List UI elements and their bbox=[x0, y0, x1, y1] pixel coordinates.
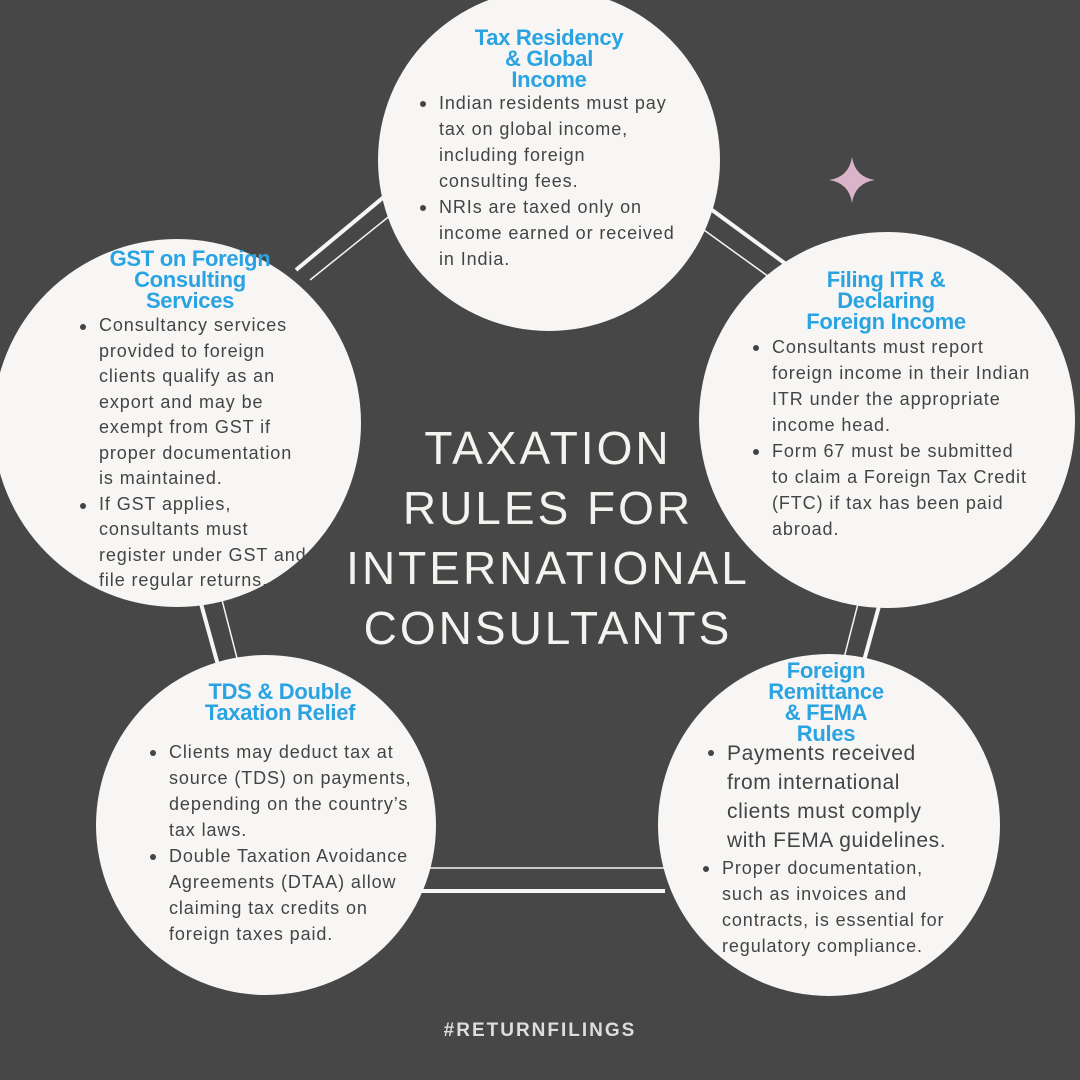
panel: remittance bbox=[703, 658, 946, 956]
text: remittance large: clients must comply bbox=[727, 800, 922, 823]
text: GST: consultants must bbox=[99, 519, 248, 539]
text: tax residency bbox=[420, 93, 675, 269]
text: TDS: depending on the country’s bbox=[169, 794, 408, 814]
text: tax residency: NRIs are taxed only on bbox=[439, 197, 642, 217]
panel: filing ITR bbox=[753, 267, 1030, 539]
text: remittance small: contracts, is essential for bbox=[722, 910, 944, 930]
heading: remittance: & FEMA bbox=[785, 700, 867, 725]
heading: GST bbox=[110, 246, 270, 313]
heading: tax residency: Income bbox=[511, 67, 587, 92]
title: CONSULTANTS bbox=[364, 602, 732, 654]
text: remittance small bbox=[703, 858, 944, 956]
title bbox=[346, 422, 750, 654]
text: remittance small: Proper documentation, bbox=[722, 858, 923, 878]
text: remittance large: from international bbox=[727, 771, 900, 794]
text: filing ITR: to claim a Foreign Tax Credit bbox=[772, 467, 1027, 487]
text: tax residency: in India. bbox=[439, 249, 510, 269]
text: TDS: Double Taxation Avoidance bbox=[169, 846, 408, 866]
text: GST: register under GST and bbox=[99, 544, 307, 564]
heading: filing ITR: Declaring bbox=[837, 288, 935, 313]
text: remittance large bbox=[708, 742, 946, 852]
text: TDS: source (TDS) on payments, bbox=[169, 768, 412, 788]
text: TDS: foreign taxes paid. bbox=[169, 924, 333, 944]
text: filing ITR: Consultants must report bbox=[772, 337, 984, 357]
text: GST: clients qualify as an bbox=[99, 366, 275, 386]
text: remittance small: regulatory compliance. bbox=[722, 936, 923, 956]
heading: TDS: TDS & Double bbox=[208, 679, 352, 704]
heading: remittance: Remittance bbox=[768, 679, 884, 704]
heading: GST: Consulting bbox=[134, 267, 246, 292]
text: TDS: tax laws. bbox=[169, 820, 247, 840]
text: filing ITR bbox=[753, 337, 1030, 539]
text: filing ITR: income head. bbox=[772, 415, 891, 435]
text: GST: provided to foreign bbox=[99, 340, 265, 360]
text: GST: is maintained. bbox=[99, 468, 223, 488]
text: tax residency: income earned or received bbox=[439, 223, 675, 243]
text: GST: If GST applies, bbox=[99, 494, 231, 514]
text: tax residency: including foreign bbox=[439, 145, 585, 165]
text: filing ITR: abroad. bbox=[772, 519, 839, 539]
text: tax residency: Indian residents must pay bbox=[439, 93, 667, 113]
heading: tax residency: Tax Residency bbox=[475, 25, 623, 50]
text: tax residency: tax on global income, bbox=[439, 119, 628, 139]
text: remittance small: such as invoices and bbox=[722, 884, 907, 904]
title: TAXATION bbox=[424, 422, 672, 474]
heading: GST: Services bbox=[146, 288, 234, 313]
text: TDS: claiming tax credits on bbox=[169, 898, 368, 918]
heading: remittance: Foreign bbox=[787, 658, 865, 683]
text: remittance large: with FEMA guidelines. bbox=[727, 829, 946, 852]
panel: TDS bbox=[150, 679, 412, 944]
text: remittance large: Payments received bbox=[727, 742, 916, 765]
heading: filing ITR bbox=[806, 267, 966, 334]
text: filing ITR: (FTC) if tax has been paid bbox=[772, 493, 1004, 513]
text: filing ITR: foreign income in their Indian bbox=[772, 363, 1030, 383]
heading: filing ITR: Foreign Income bbox=[806, 309, 966, 334]
text: GST: export and may be bbox=[99, 392, 263, 412]
panel: tax residency bbox=[420, 25, 675, 269]
text: GST bbox=[80, 315, 307, 590]
icon: sparkle bbox=[829, 157, 875, 203]
text: GST: file regular returns. bbox=[99, 570, 268, 590]
heading: tax residency bbox=[475, 25, 624, 92]
text: tax residency: consulting fees. bbox=[439, 171, 578, 191]
title: INTERNATIONAL bbox=[346, 542, 750, 594]
heading: TDS: Taxation Relief bbox=[205, 700, 355, 725]
text: GST: proper documentation bbox=[99, 442, 292, 462]
text: TDS bbox=[150, 742, 412, 944]
text: TDS: Agreements (DTAA) allow bbox=[169, 872, 396, 892]
text: filing ITR: Form 67 must be submitted bbox=[772, 441, 1014, 461]
heading: remittance: Rules bbox=[797, 721, 855, 746]
text: GST: exempt from GST if bbox=[99, 417, 271, 437]
heading: TDS bbox=[205, 679, 356, 725]
heading: remittance bbox=[768, 658, 884, 746]
footer hashtag: #RETURNFILINGS bbox=[444, 1020, 636, 1041]
heading: GST: GST on Foreign bbox=[110, 246, 270, 271]
text: filing ITR: ITR under the appropriate bbox=[772, 389, 1001, 409]
text: GST: Consultancy services bbox=[99, 315, 287, 335]
title: RULES FOR bbox=[403, 482, 693, 534]
heading: tax residency: & Global bbox=[505, 46, 593, 71]
heading: filing ITR: Filing ITR & bbox=[827, 267, 945, 292]
text: TDS: Clients may deduct tax at bbox=[169, 742, 394, 762]
panel: GST bbox=[80, 246, 307, 590]
